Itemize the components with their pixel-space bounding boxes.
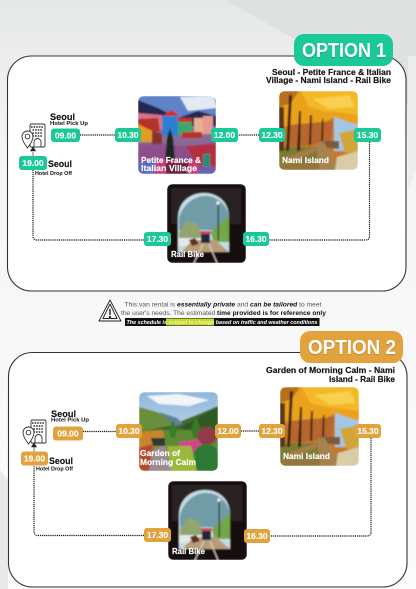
- badge: option 2: [300, 331, 403, 363]
- pickup label: Hotel Pick Up: [51, 418, 89, 424]
- note line 1: This van rental is essentially private and can be tailored to meet: [124, 302, 322, 308]
- time pills option 2: 09.00: [57, 428, 79, 438]
- dropoff label: [35, 159, 72, 177]
- pickup label: Hotel Pick Up: [50, 121, 88, 127]
- pickup label: Seoul: [50, 112, 75, 123]
- route lines option 2: [32, 431, 371, 536]
- icon: hotel and pin: [22, 124, 45, 148]
- photo: Nami Island: [280, 387, 359, 466]
- time pills option 2: 12.00: [217, 426, 239, 436]
- panel 2 outline: [8, 352, 407, 587]
- time pills option 1: 16.30: [245, 234, 267, 244]
- photo: Rail Bike: [168, 481, 247, 560]
- pickup label: [50, 112, 88, 127]
- panel: option 1: [8, 34, 406, 291]
- route heading option 2: [266, 366, 396, 384]
- time pills option 2: 15.30: [357, 426, 379, 436]
- time pills option 1: 09.00: [55, 130, 76, 140]
- time pills option 2: 16.30: [246, 531, 268, 541]
- photo: Rail Bike: [167, 184, 246, 263]
- badge: option 2: OPTION 2: [308, 337, 396, 359]
- time pills option 2: 19.00: [24, 454, 45, 464]
- time pills option 1: 10.30: [117, 130, 139, 140]
- caption: Morning Calm: [140, 457, 196, 467]
- caption: Italian Village: [141, 163, 197, 173]
- panel 1 outline: [8, 56, 406, 291]
- photo: Garden of Morning Calm: [139, 392, 218, 471]
- time pills option 1: 12.30: [261, 130, 283, 140]
- time pills option 1: 15.30: [357, 130, 378, 140]
- photo: Nami Island: Nami Island: [283, 451, 330, 461]
- route heading option 1: Seoul - Petite France & Italian: [272, 68, 391, 77]
- photo: Nami Island: Nami Island: [282, 155, 329, 165]
- time pills option 2: [21, 424, 381, 543]
- time pills option 1: 12.00: [214, 130, 235, 140]
- time pills option 2: 10.30: [118, 426, 140, 436]
- dropoff label: Hotel Drop Off: [35, 171, 72, 177]
- time pills option 2: 12.30: [261, 426, 283, 436]
- pickup label: Seoul: [51, 409, 76, 420]
- panel: option 2: [8, 331, 407, 587]
- caption: Garden of: [140, 448, 180, 458]
- route heading option 1: [266, 68, 392, 85]
- disclaimer note: [99, 300, 327, 326]
- time pills option 1: 17.30: [147, 234, 168, 244]
- caption: [141, 155, 201, 173]
- route lines option 1: [30, 135, 370, 240]
- badge: option 2: OPTION 2: [308, 338, 396, 360]
- time pills option 1: [19, 128, 381, 246]
- dropoff label: Seoul: [49, 456, 73, 467]
- badge: option 1: OPTION 1: [302, 41, 386, 63]
- time pills option 1: 19.00: [22, 158, 44, 168]
- note line 2: the user's needs. The estimated time provided is for reference only: [121, 311, 327, 317]
- caption: Petite France &: [141, 155, 201, 165]
- time pills option 2: 17.30: [147, 530, 168, 540]
- icon: warning triangle: [99, 300, 121, 321]
- caption: [140, 448, 196, 467]
- photo: Rail Bike: Rail Bike: [171, 249, 204, 259]
- pickup label: [51, 409, 89, 424]
- dropoff label: Seoul: [48, 159, 72, 170]
- route heading option 2: Garden of Morning Calm - Nami: [266, 366, 395, 375]
- icon: hotel and pin: [23, 420, 46, 444]
- dropoff label: [36, 456, 73, 472]
- photo: Rail Bike: Rail Bike: [172, 546, 205, 556]
- badge: option 1: [294, 34, 393, 66]
- route heading option 1: Village - Nami Island - Rail Bike: [266, 76, 392, 85]
- photo: Petite France: [138, 96, 216, 174]
- dropoff label: Hotel Drop Off: [36, 466, 73, 472]
- note line 3: The schedule is subject to change based on traffic and weather conditions: [126, 320, 318, 326]
- route heading option 2: Island - Rail Bike: [329, 375, 396, 384]
- badge: option 1: OPTION 1: [302, 40, 386, 62]
- photo: Nami Island: [279, 91, 358, 170]
